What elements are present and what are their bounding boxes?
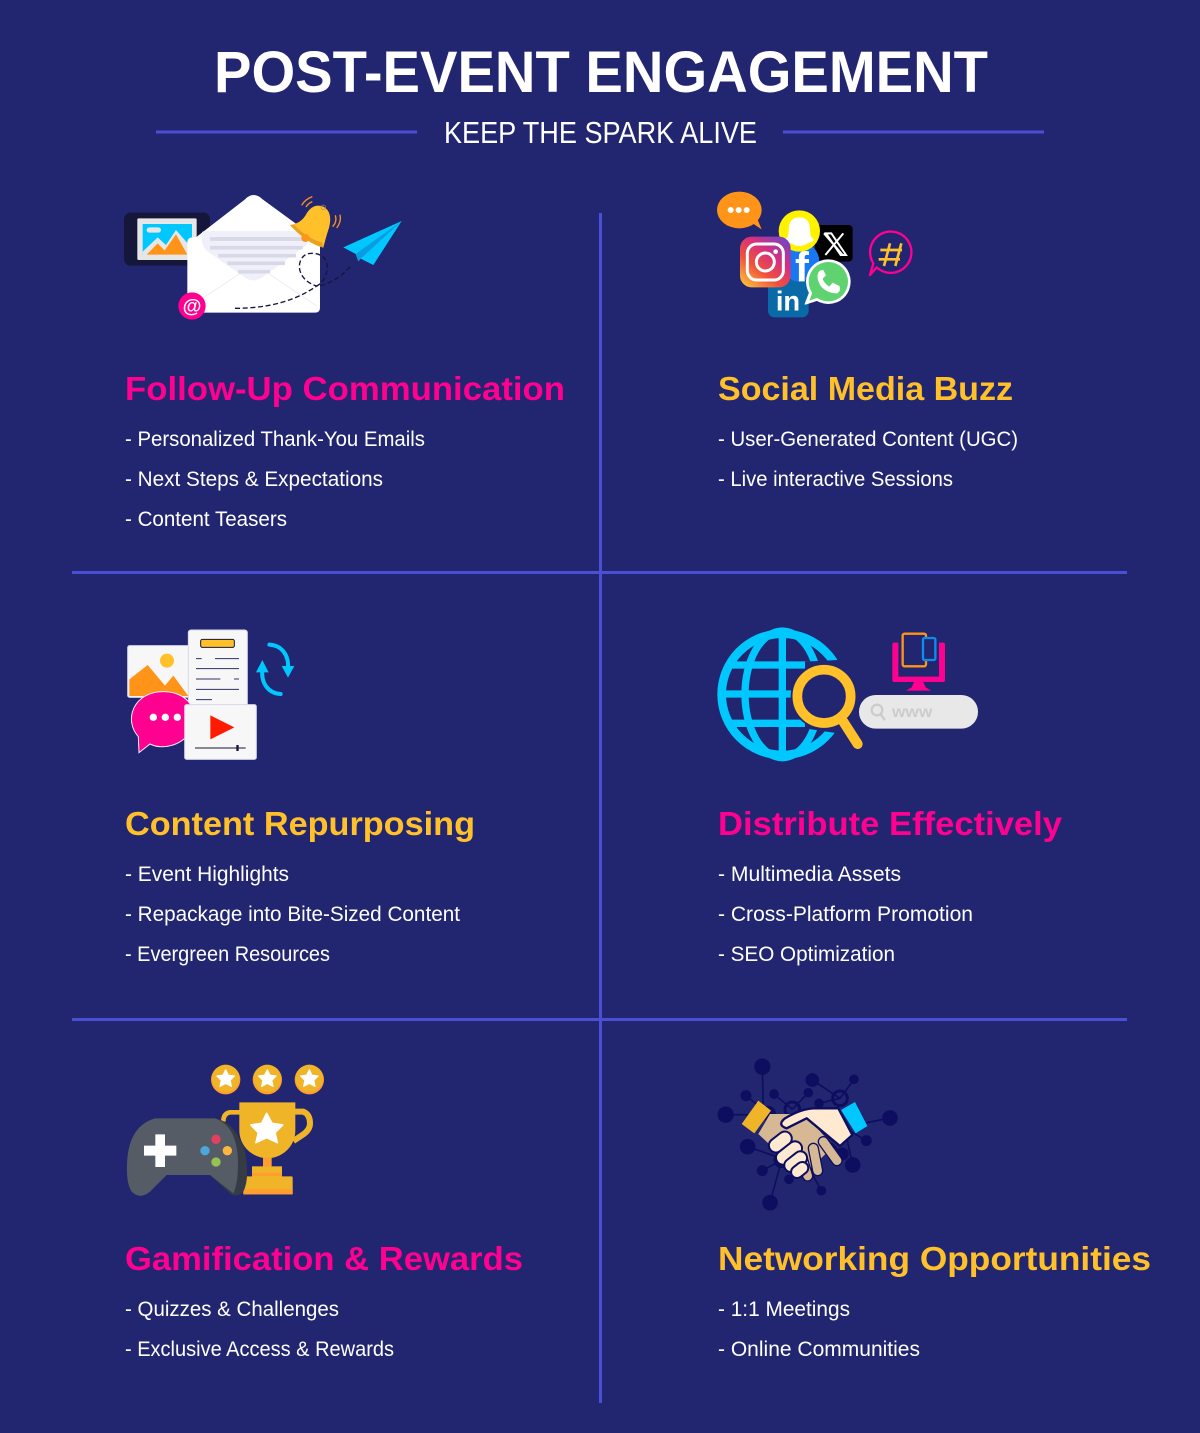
list: - Online Communities [718, 1338, 920, 1361]
heading: Follow-Up Communication [125, 370, 565, 407]
list: - Exclusive Access & Rewards [125, 1338, 394, 1361]
heading: Content Repurposing [125, 805, 475, 842]
icon: social media logos [717, 192, 911, 317]
title: POST-EVENT ENGAGEMENT [214, 40, 988, 105]
list: - Quizzes & Challenges [125, 1298, 339, 1321]
list: - Event Highlights [125, 863, 289, 886]
list: - Next Steps & Expectations [125, 468, 383, 491]
list [125, 428, 425, 531]
panel: gamification and rewards [125, 1065, 523, 1361]
heading: Gamification & Rewards [125, 1240, 523, 1277]
heading: Networking Opportunities [718, 1240, 1151, 1277]
heading: Social Media Buzz [718, 370, 1013, 407]
list: - Evergreen Resources [125, 943, 330, 966]
list: - Live interactive Sessions [718, 468, 953, 491]
icon: globe, magnifier, devices and search bar [721, 631, 978, 758]
list [125, 1298, 394, 1361]
list: - Cross-Platform Promotion [718, 903, 973, 926]
icon: envelope with bell and paper plane [124, 195, 402, 320]
icon: content formats with refresh arrows [128, 630, 294, 759]
list: - User-Generated Content (UGC) [718, 428, 1018, 451]
icon: game controller, trophy and stars [127, 1065, 324, 1196]
list: - SEO Optimization [718, 943, 895, 966]
icon: envelope with bell and paper plane: @ [183, 297, 201, 318]
list [125, 863, 460, 966]
icon: social media logos: in [776, 286, 800, 317]
panel: networking opportunities [718, 1059, 1151, 1361]
icon: social media logos: f [795, 243, 809, 290]
list: - Personalized Thank-You Emails [125, 428, 425, 451]
subtitle: KEEP THE SPARK ALIVE [444, 115, 757, 150]
list: - Content Teasers [125, 508, 287, 531]
list: - Multimedia Assets [718, 863, 901, 886]
heading: Distribute Effectively [718, 805, 1063, 842]
panel: distribute effectively [718, 631, 1063, 966]
list: - Repackage into Bite-Sized Content [125, 903, 460, 926]
panel: social media buzz [717, 192, 1018, 491]
list [718, 428, 1018, 491]
icon: globe, magnifier, devices and search bar: www [891, 704, 933, 721]
panel: content repurposing [125, 630, 475, 966]
list [718, 1298, 920, 1361]
list [718, 863, 973, 966]
panel: follow-up communication [124, 195, 565, 531]
list: - 1:1 Meetings [718, 1298, 850, 1321]
icon: handshake with network nodes [718, 1059, 897, 1210]
